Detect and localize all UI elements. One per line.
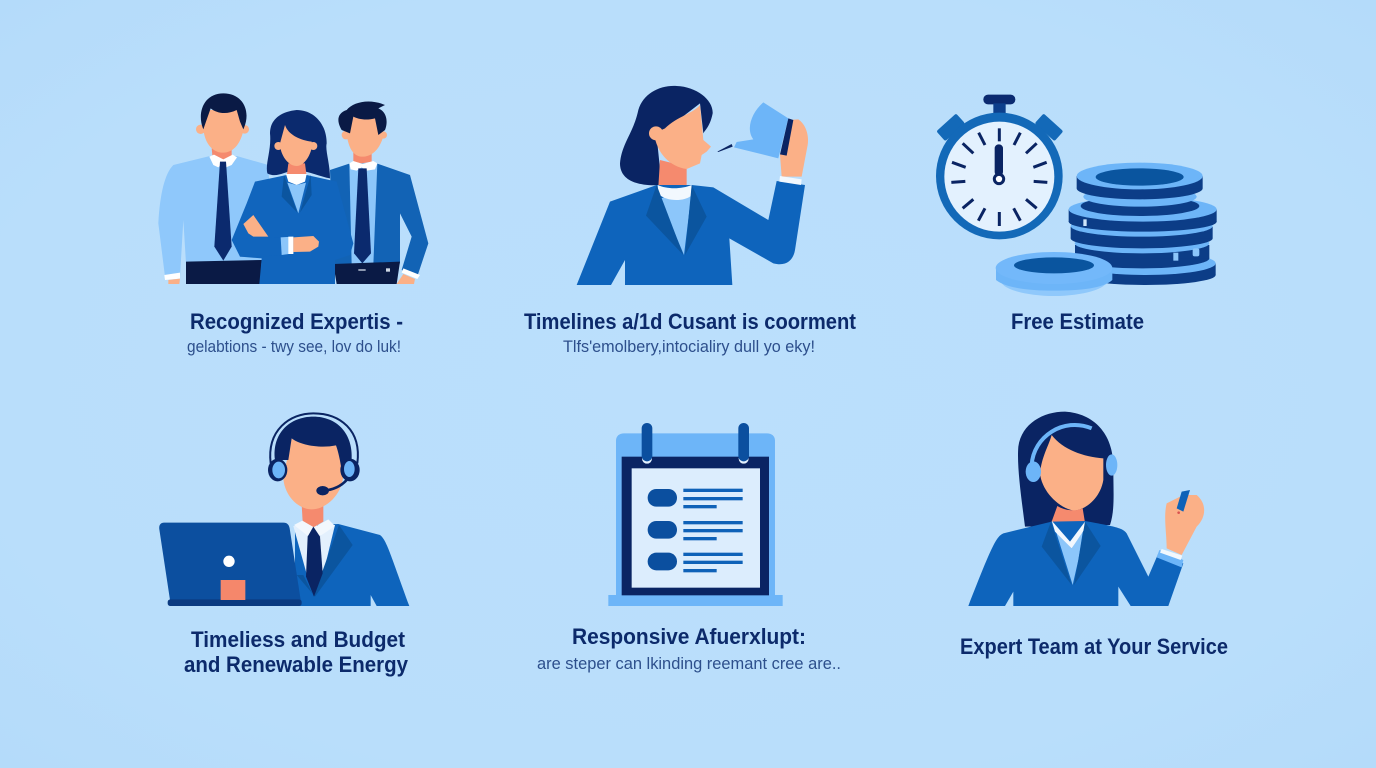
icon: support agent at laptop xyxy=(159,413,409,606)
panel: responsive xyxy=(537,423,841,673)
panel: timeliness and budget xyxy=(159,413,409,677)
icon: woman with headset xyxy=(968,412,1204,606)
panel: free estimate xyxy=(936,95,1217,334)
panel: expert team xyxy=(960,412,1228,659)
icon: stopwatch and coins xyxy=(936,95,1217,296)
text: responsive description: are steper can lkinding reemant cree are.. xyxy=(537,654,841,673)
text: timelines description: Tlfs'emolbery,intocialiry dull yo eky! xyxy=(563,337,815,356)
woman with folded arms xyxy=(232,110,353,284)
heading: timeliness and budget: Timeliess and Budget xyxy=(191,627,406,652)
icon: woman holding cup xyxy=(577,86,808,285)
left man xyxy=(158,93,273,284)
heading: responsive: Responsive Afuerxlupt: xyxy=(572,624,806,649)
heading: recognized expertis: Recognized Expertis - xyxy=(190,309,403,334)
text: recognized expertis description: gelabtions - twy see, lov do luk! xyxy=(187,337,401,356)
icon: team of three people xyxy=(158,93,428,284)
icon: calendar checklist xyxy=(608,423,783,606)
heading: timelines and consultant: Timelines a/1d Cusant is coorment xyxy=(524,309,857,334)
right man xyxy=(330,101,428,284)
coin stack xyxy=(1069,163,1217,285)
panel: recognized expertise xyxy=(158,93,428,356)
heading: expert team: Expert Team at Your Service xyxy=(960,634,1228,659)
stopwatch xyxy=(936,95,1063,239)
heading: free estimate: Free Estimate xyxy=(1011,309,1144,334)
panel: timelines and consultant xyxy=(524,86,857,356)
heading: renewable energy: and Renewable Energy xyxy=(184,652,409,677)
foreground coin xyxy=(996,252,1112,296)
